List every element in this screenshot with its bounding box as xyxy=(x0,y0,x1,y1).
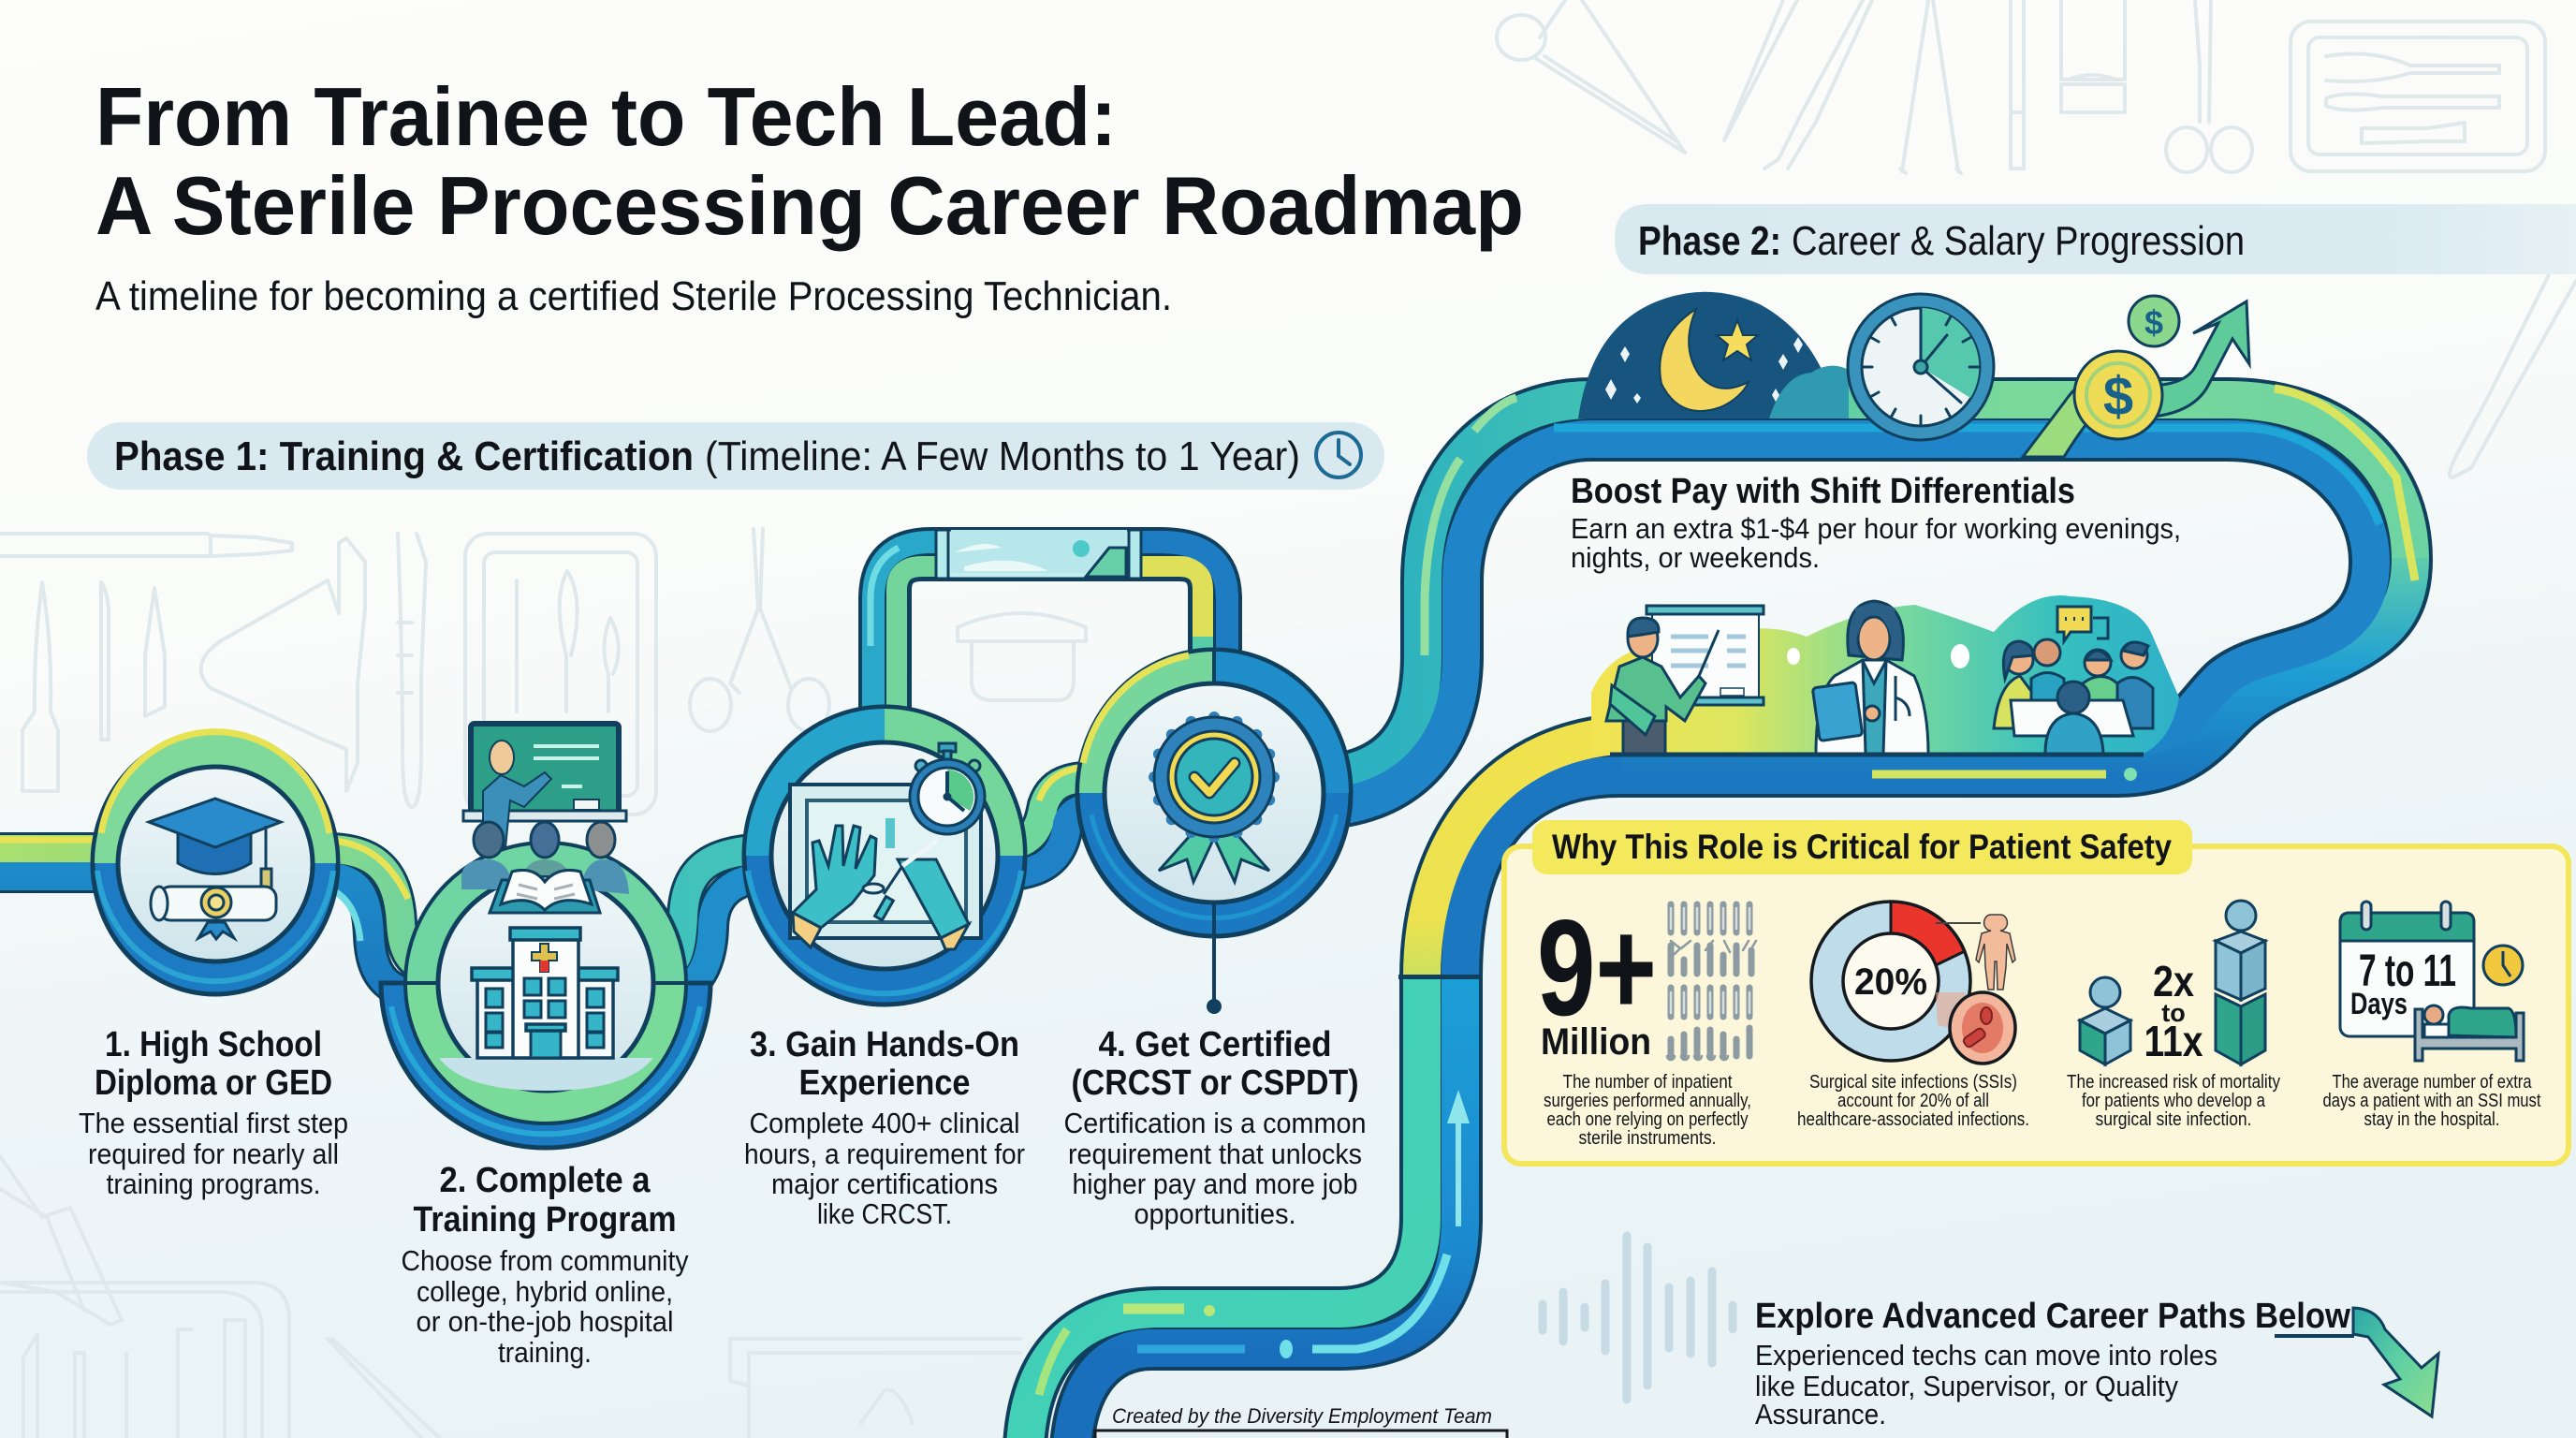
step 1 text: The essential first step xyxy=(79,1107,348,1139)
step 3 text: Experience xyxy=(799,1064,970,1103)
shift differentials text: Earn an extra $1-$4 per hour for working evenings, xyxy=(1571,512,2181,545)
step 4 text: higher pay and more job xyxy=(1073,1167,1357,1200)
icon: small figure xyxy=(2080,977,2130,1064)
step 1 text xyxy=(79,1025,348,1200)
stat: mortality risk: for patients who develop a xyxy=(2082,1091,2266,1111)
stat: mortality risk xyxy=(2067,901,2280,1130)
illustration: team meeting xyxy=(1994,607,2153,754)
step 1 node xyxy=(93,732,338,994)
icon: night sky dome xyxy=(1578,292,1849,418)
phase 2 banner: Phase 2: xyxy=(1638,218,1781,264)
stat: 9+ million: The number of inpatient xyxy=(1563,1072,1733,1093)
step 1 text: Diploma or GED xyxy=(95,1064,332,1103)
icon: banner clock xyxy=(1316,433,1361,477)
icon: money growth arrow xyxy=(2023,296,2249,457)
panel tab heading xyxy=(1532,820,2192,874)
title: From Trainee to Tech Lead: xyxy=(95,70,1117,163)
step 3 text: hours, a requirement for xyxy=(744,1137,1025,1170)
connector line and dot xyxy=(1207,936,1222,1014)
icon: diploma xyxy=(151,887,276,939)
phase 1 banner: (Timeline: A Few Months to 1 Year) xyxy=(705,433,1300,479)
stat: 20% donut: healthcare-associated infections. xyxy=(1797,1109,2029,1130)
step 3 text: 3. Gain Hands-On xyxy=(750,1025,1019,1064)
shift differentials text: Boost Pay with Shift Differentials xyxy=(1571,472,2075,511)
icon: down arrow xyxy=(2275,1308,2438,1416)
stat: 9+ million: Million xyxy=(1541,1021,1651,1063)
advanced career paths text: Experienced techs can move into roles xyxy=(1755,1339,2217,1372)
stat: 20% donut xyxy=(1797,902,2029,1130)
stat: extra days xyxy=(2323,902,2541,1130)
phase 1 banner xyxy=(87,422,1384,490)
phase 1 banner: Phase 1: Training & Certification xyxy=(114,433,694,479)
step 2 text: training. xyxy=(498,1336,592,1369)
road edge under people xyxy=(1610,753,2144,756)
credit line: Created by the Diversity Employment Team xyxy=(1112,1404,1492,1428)
roadmap road: phase 1 xyxy=(0,542,1227,997)
icon: wound closeup xyxy=(1950,992,2015,1064)
patient safety panel xyxy=(1504,820,2569,1164)
phase 2 banner: Career & Salary Progression xyxy=(1792,218,2245,264)
icon: stopwatch xyxy=(910,743,985,834)
stat: 9+ million: 9+ xyxy=(1537,891,1657,1044)
step 1 text: training programs. xyxy=(107,1167,320,1200)
decorative blob dots xyxy=(1787,644,1969,668)
icon: hospital xyxy=(439,928,653,1091)
stat: extra days: The average number of extra xyxy=(2333,1072,2532,1093)
ghost instruments: top right xyxy=(1497,0,2545,173)
icon: body figure xyxy=(1976,915,2015,990)
arrow on road xyxy=(1447,1090,1470,1226)
advanced career paths text xyxy=(1755,1297,2350,1431)
step 2 text: college, hybrid online, xyxy=(417,1275,673,1308)
step 4 text: requirement that unlocks xyxy=(1068,1137,1362,1170)
ghost sound wave xyxy=(1543,1236,1733,1400)
stat: mortality risk: 2x xyxy=(2153,957,2194,1005)
shift differentials text xyxy=(1571,472,2181,574)
icon: money growth arrow: $ xyxy=(2144,303,2163,342)
icon: hospital bed xyxy=(2415,1005,2524,1061)
stat: extra days: 7 to 11 xyxy=(2359,946,2456,996)
icon: instrument grid xyxy=(1667,904,1756,1060)
icon: gloved hands and scissors xyxy=(793,826,969,949)
icon: open book xyxy=(490,870,600,913)
stat: mortality risk: to xyxy=(2161,999,2186,1027)
advanced career paths text: Assurance. xyxy=(1755,1398,1886,1431)
icon: blackboard with teacher xyxy=(463,724,626,847)
roadmap road: phase 2 xyxy=(1025,389,2415,1438)
stat: mortality risk: surgical site infection. xyxy=(2095,1109,2252,1130)
stat: 20% donut: Surgical site infections (SSIs) xyxy=(1809,1072,2017,1093)
stat: mortality risk: The increased risk of mortality xyxy=(2067,1072,2280,1093)
icon: students xyxy=(461,822,629,894)
ghost instruments: right tweezers xyxy=(2450,220,2576,477)
advanced career paths text: like Educator, Supervisor, or Quality xyxy=(1755,1370,2178,1402)
shift differentials text: nights, or weekends. xyxy=(1571,541,1820,574)
stat: 9+ million xyxy=(1537,891,1756,1149)
step 4 text: opportunities. xyxy=(1134,1197,1295,1230)
road highlights xyxy=(0,548,1095,941)
icon: wall clock xyxy=(1848,294,1994,440)
step 3 text: Complete 400+ clinical xyxy=(749,1107,1020,1139)
step 2 text xyxy=(401,1161,689,1369)
stat: extra days: Days xyxy=(2350,987,2408,1020)
ghost instruments: bottom left and goggles xyxy=(0,1156,1020,1438)
icon: calendar xyxy=(2340,902,2474,1036)
stat: mortality risk: 11x xyxy=(2144,1017,2203,1065)
subtitle: A timeline for becoming a certified Sterile Processing Technician. xyxy=(95,273,1172,319)
step 4 text: Certification is a common xyxy=(1063,1107,1367,1139)
panel tab heading: Why This Role is Critical for Patient Safety xyxy=(1552,828,2172,866)
stat: 9+ million: surgeries performed annually, xyxy=(1544,1091,1751,1111)
step 4 text: (CRCST or CSPDT) xyxy=(1071,1064,1359,1103)
stat: 20% donut: account for 20% of all xyxy=(1837,1091,1989,1111)
title xyxy=(95,70,1524,252)
icon: graduation cap xyxy=(149,799,281,893)
step 2 text: Training Program xyxy=(414,1200,676,1240)
icon: glass instrument box xyxy=(790,785,981,938)
road highlights phase 2 xyxy=(1039,389,2415,1395)
advanced career paths text: Explore Advanced Career Paths Below xyxy=(1755,1297,2350,1336)
people blob on road xyxy=(1591,595,2179,754)
stat: extra days: stay in the hospital. xyxy=(2364,1109,2499,1130)
step 4 text xyxy=(1063,1025,1367,1230)
credit line xyxy=(1095,1404,1507,1438)
illustration: clinician xyxy=(1812,601,1928,754)
step 4 node xyxy=(1077,650,1351,936)
stat: 9+ million: sterile instruments. xyxy=(1578,1128,1717,1149)
step 4 text: 4. Get Certified xyxy=(1099,1025,1331,1064)
stat: 9+ million: each one relying on perfectly xyxy=(1546,1109,1749,1130)
step 2 text: Choose from community xyxy=(401,1244,689,1277)
phase 2 banner xyxy=(1615,204,2576,274)
icon: yellow clock xyxy=(2483,946,2523,985)
step 2 text: or on-the-job hospital xyxy=(416,1305,674,1338)
step 2 text: 2. Complete a xyxy=(440,1161,651,1200)
glass tube on loop xyxy=(936,530,1141,579)
stat: 20% donut: 20% xyxy=(1854,961,1927,1003)
step 2 node xyxy=(381,724,710,1148)
step 3 text: like CRCST. xyxy=(817,1197,952,1230)
icon: tall figure xyxy=(2216,901,2265,1064)
illustration: educator xyxy=(1606,606,1764,754)
step 1 text: required for nearly all xyxy=(88,1137,339,1170)
step 1 text: 1. High School xyxy=(105,1025,322,1064)
step 3 text xyxy=(744,1025,1025,1230)
step 3 node xyxy=(744,707,1025,1005)
step 3 text: major certifications xyxy=(771,1167,998,1200)
ghost instruments: left block xyxy=(0,529,1086,814)
title: A Sterile Processing Career Roadmap xyxy=(95,159,1524,252)
icon: certification ribbon xyxy=(1154,717,1274,882)
icon: money growth arrow: $ xyxy=(2103,366,2133,427)
